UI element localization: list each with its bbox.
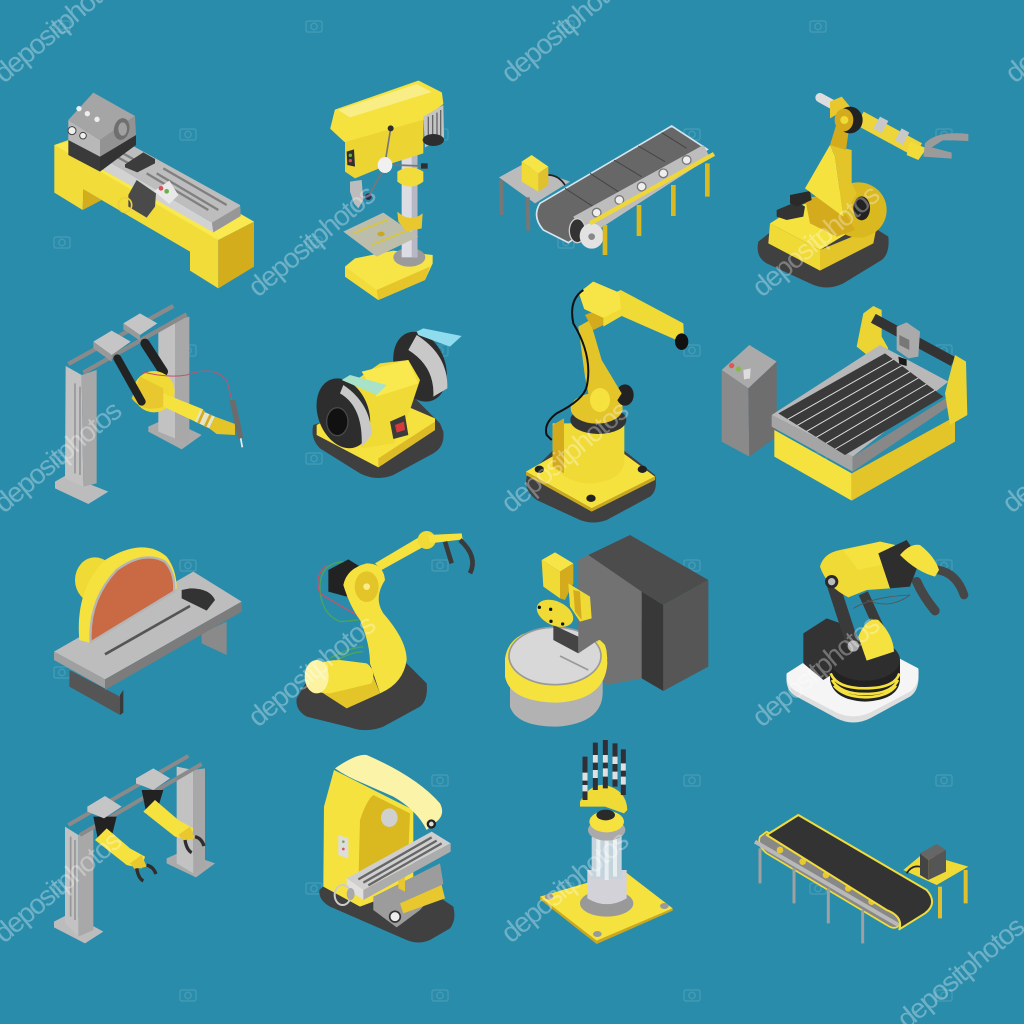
- machine: six-axis yellow arm on column: [526, 283, 688, 522]
- machine: black robot arm on white base: [786, 540, 964, 722]
- machine: welding gantry robot: [55, 306, 242, 504]
- watermark: depositphotos text repeated: depositphotos: [242, 179, 381, 303]
- machine: drill press: [332, 82, 444, 300]
- machine: conveyor belt with grey frame: [499, 126, 714, 255]
- watermark: depositphotos text repeated: depositphotos: [746, 609, 885, 733]
- machine: robotic hand on yellow plate: [540, 740, 673, 944]
- machine: lathe: [54, 93, 254, 288]
- machine: disc sander: [54, 547, 242, 715]
- machine: rotary table with dark housing: [505, 535, 708, 727]
- machine: robot arm on dark round base: [758, 97, 968, 287]
- machine: conveyor belt with yellow frame: [755, 815, 968, 943]
- machine: S-shaped yellow robot with coloured wires: [296, 531, 473, 730]
- watermark: depositphotos text repeated: depositphotos: [495, 395, 634, 519]
- watermark: depositphotos text repeated: depositphotos: [495, 825, 634, 949]
- machine: CNC router table with cabinet: [722, 306, 967, 501]
- machine: small gantry with two yellow arms: [54, 756, 215, 943]
- machine: milling machine: [319, 755, 454, 942]
- watermark: depositphotos text repeated: depositphotos: [242, 609, 381, 733]
- machine: bench grinder: [307, 324, 462, 478]
- watermark: depositphotos text repeated: depositphotos: [746, 179, 885, 303]
